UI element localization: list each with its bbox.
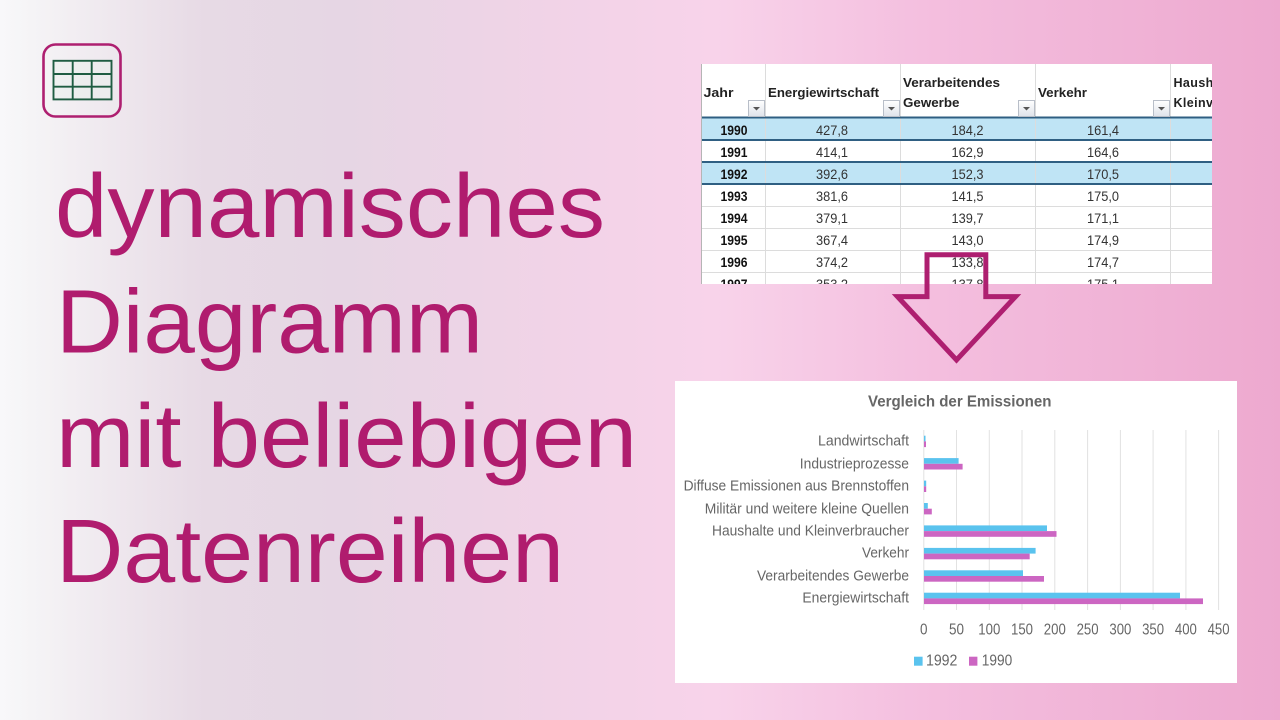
table rows: 1994 — [720, 211, 748, 226]
axis tick labels: 100 — [978, 622, 1001, 638]
table rows: 139,7 — [952, 210, 984, 226]
table rows: 1995 — [720, 233, 748, 248]
table rows: 164,6 — [1087, 144, 1119, 160]
table rows: 414,1 — [816, 144, 848, 160]
table rows: 184,2 — [952, 122, 984, 138]
category labels: Landwirtschaft — [818, 432, 910, 450]
legend — [914, 652, 1013, 670]
table header — [704, 78, 1212, 107]
table header: Verarbeitendes — [903, 76, 1000, 90]
table rows: 137,8 — [952, 276, 984, 292]
axis tick labels: 400 — [1175, 622, 1197, 638]
table rows: 162,9 — [952, 144, 984, 160]
table rows: 133,8 — [952, 254, 984, 270]
chart title: Vergleich der Emissionen — [868, 394, 1052, 410]
legend: 1990 — [982, 652, 1013, 670]
table header: Verkehr — [1038, 86, 1087, 100]
legend: 1992 — [926, 652, 957, 670]
table rows: 374,2 — [816, 254, 848, 270]
table rows: 170,5 — [1087, 166, 1119, 182]
table header: Jahr — [704, 86, 734, 100]
title: Datenreihen — [56, 502, 564, 602]
category labels: Energiewirtschaft — [802, 590, 910, 606]
table header: Haushalte und — [1174, 76, 1265, 90]
table rows: 141,5 — [952, 188, 984, 204]
table rows: 174,7 — [1087, 254, 1119, 270]
table rows: 175,1 — [1087, 276, 1119, 292]
table rows: 367,4 — [816, 232, 848, 248]
category labels — [684, 432, 910, 606]
table rows: 1996 — [720, 255, 748, 270]
table rows: 1993 — [720, 189, 748, 204]
table rows: 1992 — [720, 167, 748, 182]
table rows: 174,9 — [1087, 232, 1119, 248]
title: mit beliebigen — [56, 387, 637, 487]
table header: Gewerbe — [903, 96, 960, 110]
bars 1992 — [924, 436, 1180, 598]
axis tick labels — [920, 622, 1230, 638]
category labels: Industrieprozesse — [800, 456, 909, 472]
icon: spreadsheet table — [44, 44, 120, 116]
table header: Kleinverbraucher — [1174, 96, 1280, 110]
table rows: 161,4 — [1087, 122, 1119, 138]
category labels: Verarbeitendes Gewerbe — [757, 568, 909, 584]
filter buttons — [748, 100, 1170, 116]
table rows: 175,0 — [1087, 188, 1119, 204]
table header: Energiewirtschaft — [768, 86, 880, 100]
table rows: 1991 — [720, 145, 748, 160]
axis tick labels: 300 — [1109, 622, 1132, 638]
panel: data table — [701, 64, 1212, 284]
axis tick labels: 150 — [1011, 622, 1033, 638]
table rows: 143,0 — [952, 232, 984, 248]
axis tick labels: 0 — [920, 622, 928, 638]
table rows: 381,6 — [816, 188, 848, 204]
table rows: 379,1 — [816, 210, 848, 226]
table rows: 392,6 — [816, 166, 848, 182]
axis tick labels: 200 — [1044, 622, 1066, 638]
axis tick labels: 250 — [1077, 622, 1099, 638]
category labels: Militär und weitere kleine Quellen — [705, 500, 909, 518]
table rows — [720, 122, 1119, 292]
table rows: 427,8 — [816, 122, 848, 138]
panel: bar chart — [675, 381, 1237, 683]
category labels: Haushalte und Kleinverbraucher — [712, 522, 909, 540]
axis tick labels: 350 — [1142, 622, 1164, 638]
axis tick labels: 50 — [949, 622, 964, 638]
table rows: 171,1 — [1087, 210, 1119, 226]
category labels: Verkehr — [862, 544, 909, 562]
title: dynamisches — [55, 157, 605, 257]
category labels: Diffuse Emissionen aus Brennstoffen — [684, 478, 909, 494]
table rows: 1990 — [720, 123, 748, 138]
title: Diagramm — [56, 272, 483, 372]
bars 1990 — [924, 441, 1203, 604]
table rows: 1997 — [720, 277, 748, 292]
arrow: down — [898, 255, 1016, 360]
axis tick labels: 450 — [1208, 622, 1230, 638]
table rows: 152,3 — [952, 166, 984, 182]
table rows: 353,2 — [816, 276, 848, 292]
title — [55, 157, 637, 602]
